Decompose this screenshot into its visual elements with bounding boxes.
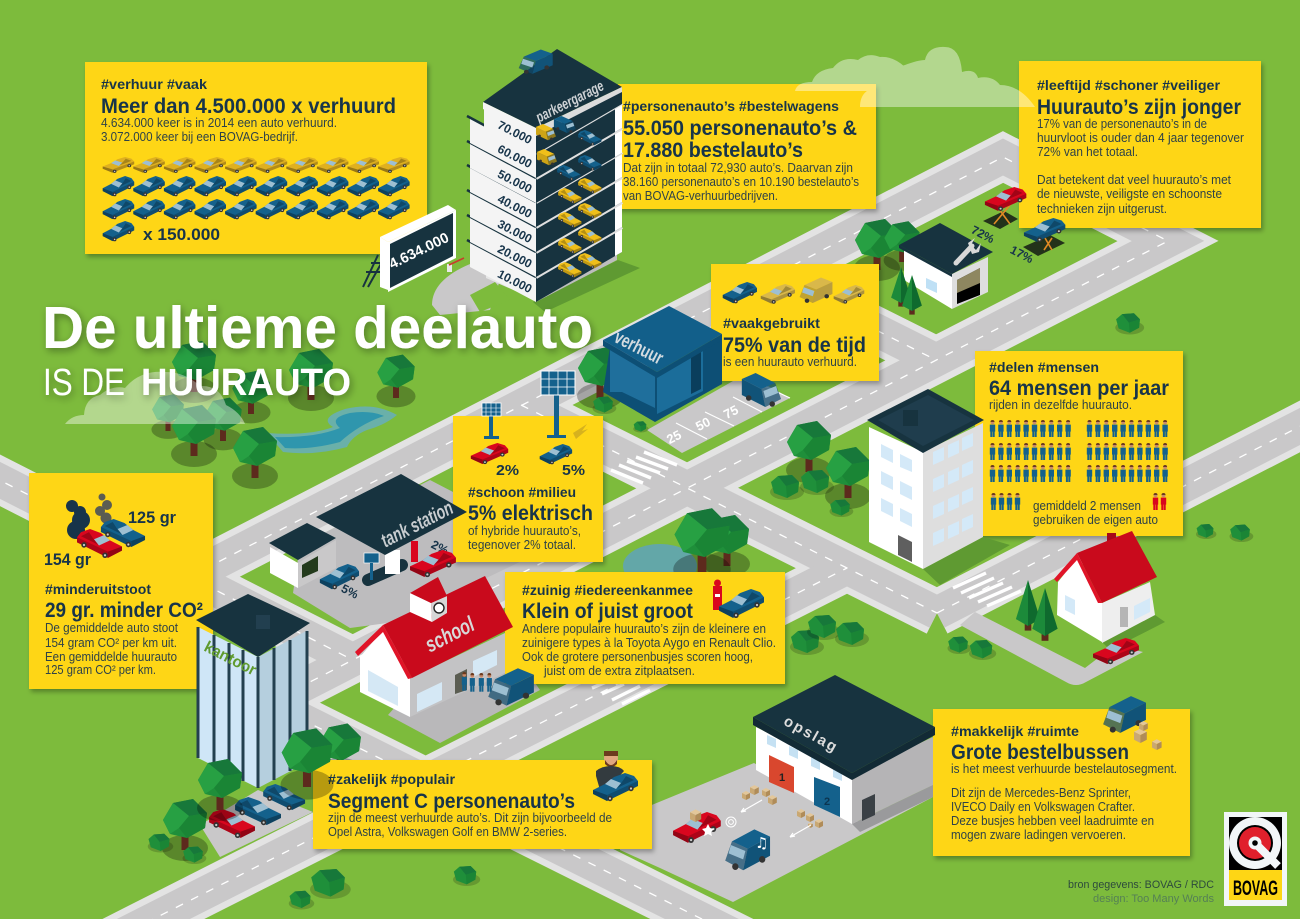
panel: schoon: 5% — [562, 462, 585, 479]
floor labels: 40.000 — [495, 192, 535, 221]
panel: personenauto's: #personenauto’s #bestelwagens — [623, 98, 839, 114]
panel: personenauto's: Dat zijn in totaal 72,930 auto’s. Daarvan zijn — [623, 161, 853, 175]
panel: CO2: De gemiddelde auto stoot — [45, 621, 178, 635]
panel: delen: rijden in dezelfde huurauto. — [989, 398, 1132, 412]
panel: CO2: 154 gram CO² per km uit. — [45, 636, 177, 650]
panel: leeftijd: Huurauto’s zijn jonger — [1037, 96, 1241, 119]
panel: schoon — [453, 371, 603, 562]
panel: zuinig: #zuinig #iedereenkanmee — [522, 582, 693, 598]
pond: centre block — [623, 544, 697, 588]
parking marks: 50 — [693, 414, 713, 434]
panel: leeftijd: 72% van het totaal. — [1037, 145, 1138, 159]
floor labels: 30.000 — [495, 217, 535, 246]
icon: smoke clouds — [66, 494, 112, 539]
driveway to house — [960, 612, 1143, 685]
firs at house — [1016, 580, 1058, 641]
icon: business man and car — [593, 751, 638, 801]
icon: fuel pump and car — [713, 580, 764, 618]
building: opslag — [753, 675, 935, 832]
panel: makkelijk: IVECO Daily en Volkswagen Crafter. — [951, 800, 1135, 814]
panel: personenauto's: 38.160 personenauto’s en 10.190 bestelauto’s — [623, 175, 859, 189]
sources: design: Too Many Words — [1093, 893, 1215, 905]
pupils — [462, 672, 492, 692]
panel: verhuur — [85, 62, 427, 254]
building: white apartment — [867, 389, 1010, 585]
cloud: top right — [795, 47, 1035, 107]
parking marks — [664, 385, 790, 447]
panel: CO2: #minderuitstoot — [45, 581, 151, 597]
floor labels: 60.000 — [495, 142, 535, 171]
roof — [483, 49, 622, 128]
panel: zuinig: zuinigere types à la Toyota Aygo en Renault Clio. — [522, 636, 776, 650]
panel: zakelijk — [313, 751, 652, 849]
panel: verhuur: 4.634.000 keer is in 2014 een auto verhuurd. — [101, 116, 337, 130]
panel: vaakgebruikt: 75% van de tijd — [723, 334, 866, 357]
panel: verhuur: Meer dan 4.500.000 x verhuurd — [101, 95, 396, 118]
building: parkeergarage — [467, 49, 640, 312]
sources: bron gegevens: BOVAG / RDC — [1068, 879, 1214, 891]
ground floor — [486, 253, 536, 300]
panel: CO2: Een gemiddelde huurauto — [45, 650, 177, 664]
building: tank station: 5% — [339, 581, 361, 602]
opslag lot — [620, 763, 933, 902]
panel: verhuur: 3.072.000 keer bij een BOVAG-bedrijf. — [101, 130, 298, 144]
panel: personenauto's: 55.050 personenauto’s & — [623, 117, 857, 140]
panel: delen: #delen #mensen — [989, 359, 1099, 375]
panel: leeftijd: 17% van de personenauto’s in de — [1037, 117, 1207, 131]
panel: makkelijk: #makkelijk #ruimte — [951, 723, 1079, 739]
pond: title park — [267, 407, 397, 453]
panel: zuinig: Andere populaire huurauto’s zijn de kleinere en — [522, 622, 766, 636]
red car at house — [1093, 638, 1139, 664]
panel: personenauto's: van BOVAG-verhuurbedrijven. — [623, 189, 778, 203]
kantoor trees — [197, 728, 333, 821]
panel: schoon: tegenover 2% totaal. — [468, 538, 576, 552]
panel: zuinig: juist om de extra zitplaatsen. — [543, 664, 695, 678]
panel: leeftijd: #leeftijd #schoner #veiliger — [1037, 77, 1221, 93]
panel: zakelijk: zijn de meest verhuurde auto’s. Dit zijn bijvoorbeeld de — [328, 811, 612, 825]
building: tank station: tank station — [378, 497, 457, 552]
firs at werkplaats — [891, 267, 922, 315]
car pictogram rows — [103, 157, 410, 241]
title: De ultieme deelauto — [42, 295, 593, 361]
panel: CO2: 154 gr — [44, 550, 91, 569]
floor labels: 50.000 — [495, 167, 535, 196]
title: IS DE — [43, 362, 125, 404]
panel: makkelijk — [933, 696, 1190, 856]
sources — [1068, 879, 1215, 905]
small solar charger — [364, 553, 379, 563]
cartons, arrows and vehicles at opslag — [673, 785, 823, 870]
crosswalks — [592, 452, 1021, 704]
parking marks: 75 — [721, 402, 741, 422]
panel: schoon: #schoon #milieu — [468, 484, 576, 500]
panel: makkelijk: Dit zijn de Mercedes-Benz Sprinter, — [951, 786, 1131, 800]
billboard 4.634.000: 4.634.000 — [387, 230, 452, 273]
building: house — [1054, 531, 1165, 650]
panel: personenauto's — [618, 84, 876, 209]
panel: schoon: of hybride huurauto’s, — [468, 524, 581, 538]
cartons, arrows and vehicles at opslag: ♫ — [755, 834, 768, 852]
building: verhuur — [603, 306, 722, 422]
panel: delen — [975, 351, 1183, 536]
panel: CO2 — [29, 473, 213, 689]
van at verhuur parking — [742, 373, 781, 407]
lift: red car 72% — [969, 187, 1026, 246]
dumpster — [862, 794, 875, 821]
kantoor parking — [200, 790, 313, 857]
billboard 4.634.000 — [363, 205, 456, 292]
panel: leeftijd: technieken zijn uitgerust. — [1037, 202, 1167, 216]
panel: delen: gebruiken de eigen auto — [1033, 513, 1158, 527]
building: verhuur: verhuur — [611, 327, 667, 369]
garage driveway and barrier — [432, 258, 510, 315]
lift: blue car 17% — [1008, 218, 1065, 266]
building: tank station — [269, 474, 467, 602]
panel: schoon: 5% elektrisch — [468, 502, 593, 525]
panel: verhuur: x 150.000 — [143, 225, 220, 244]
panel: personenauto's: 17.880 bestelauto’s — [623, 139, 803, 162]
icon: blue and red cars — [77, 519, 145, 558]
kantoor parking cars — [209, 784, 305, 838]
panel: zakelijk: #zakelijk #populair — [328, 771, 456, 787]
panel: verhuur: #verhuur #vaak — [101, 76, 207, 92]
panel: zakelijk: Segment C personenauto’s — [328, 790, 575, 813]
parking marks: 25 — [664, 427, 684, 447]
floor labels: 70.000 — [495, 118, 535, 147]
building: kantoor: kantoor — [201, 639, 259, 679]
lift: blue car 17%: 17% — [1008, 243, 1036, 266]
building: werkplaats — [899, 223, 993, 309]
icon: delivery van and boxes — [1103, 696, 1162, 750]
icon: right solar charger and blue car — [540, 371, 588, 464]
icon: wrench — [956, 246, 972, 263]
panel: leeftijd: huurvloot is ouder dan 4 jaar tegenover — [1037, 131, 1244, 145]
title: HUURAUTO — [141, 362, 351, 404]
panel: zakelijk: Opel Astra, Volkswagen Golf en BMW 2-series. — [328, 825, 567, 839]
building: opslag: opslag — [781, 713, 840, 756]
lift: red car 72%: 72% — [969, 223, 997, 246]
panel: delen: 64 mensen per jaar — [989, 377, 1169, 400]
building: parkeergarage: parkeergarage — [532, 78, 607, 127]
building: school: school — [421, 611, 479, 657]
panel: leeftijd: Dat betekent dat veel huurauto’s met — [1037, 173, 1231, 187]
icon: left solar charger and red car — [471, 403, 508, 464]
panel: leeftijd: de nieuwste, veiligste en schoonste — [1037, 187, 1222, 201]
panel: makkelijk: Grote bestelbussen — [951, 741, 1129, 764]
tank station pad — [293, 480, 555, 628]
panel: vaakgebruikt: #vaakgebruikt — [723, 315, 820, 331]
panel: vaakgebruikt — [711, 264, 879, 381]
cloud: title — [65, 372, 245, 424]
floor labels — [495, 118, 535, 296]
panel: schoon: 2% — [496, 462, 519, 479]
shadow — [533, 260, 640, 312]
school pad — [388, 640, 540, 743]
block trees and bushes — [148, 219, 1253, 910]
building: opslag: 2 — [824, 796, 830, 808]
building: tank station: 2% — [429, 537, 451, 558]
panel: vaakgebruikt: is een huurauto verhuurd. — [723, 355, 857, 369]
panel: makkelijk: is het meest verhuurde bestelautosegment. — [951, 762, 1177, 776]
garage vehicles — [519, 49, 601, 278]
panel: CO2: 125 gr — [128, 508, 176, 527]
verhuur parking — [647, 377, 790, 453]
top storey — [484, 106, 536, 155]
floor labels: 10.000 — [495, 267, 535, 296]
panel: CO2: 29 gr. minder CO² — [45, 599, 203, 622]
title — [42, 295, 593, 404]
floor labels: 20.000 — [495, 242, 535, 271]
fuel pump — [411, 541, 418, 562]
panel: delen: gemiddeld 2 mensen — [1033, 499, 1141, 513]
panel: zuinig: Klein of juist groot — [522, 600, 693, 623]
panel: CO2: 125 gram CO² per km. — [45, 663, 156, 677]
panel: zuinig — [505, 572, 785, 684]
panel: makkelijk: Deze busjes hebben veel laadruimte en — [951, 814, 1154, 828]
panel: makkelijk: mogen zware ladingen vervoeren. — [951, 828, 1126, 842]
panel: leeftijd — [1019, 61, 1261, 228]
logo: BOVAG — [1224, 812, 1287, 906]
people pictogram — [990, 420, 1168, 510]
building: opslag: 1 — [779, 772, 785, 784]
school tower — [410, 577, 447, 622]
usage pictogram: one active car, three dimmed vehicles — [723, 278, 864, 304]
building: kantoor — [196, 594, 310, 788]
panel: zuinig: Ook de grotere personenbusjes scoren hoog, — [522, 650, 753, 664]
park trees — [151, 341, 416, 489]
building: school — [355, 576, 534, 717]
